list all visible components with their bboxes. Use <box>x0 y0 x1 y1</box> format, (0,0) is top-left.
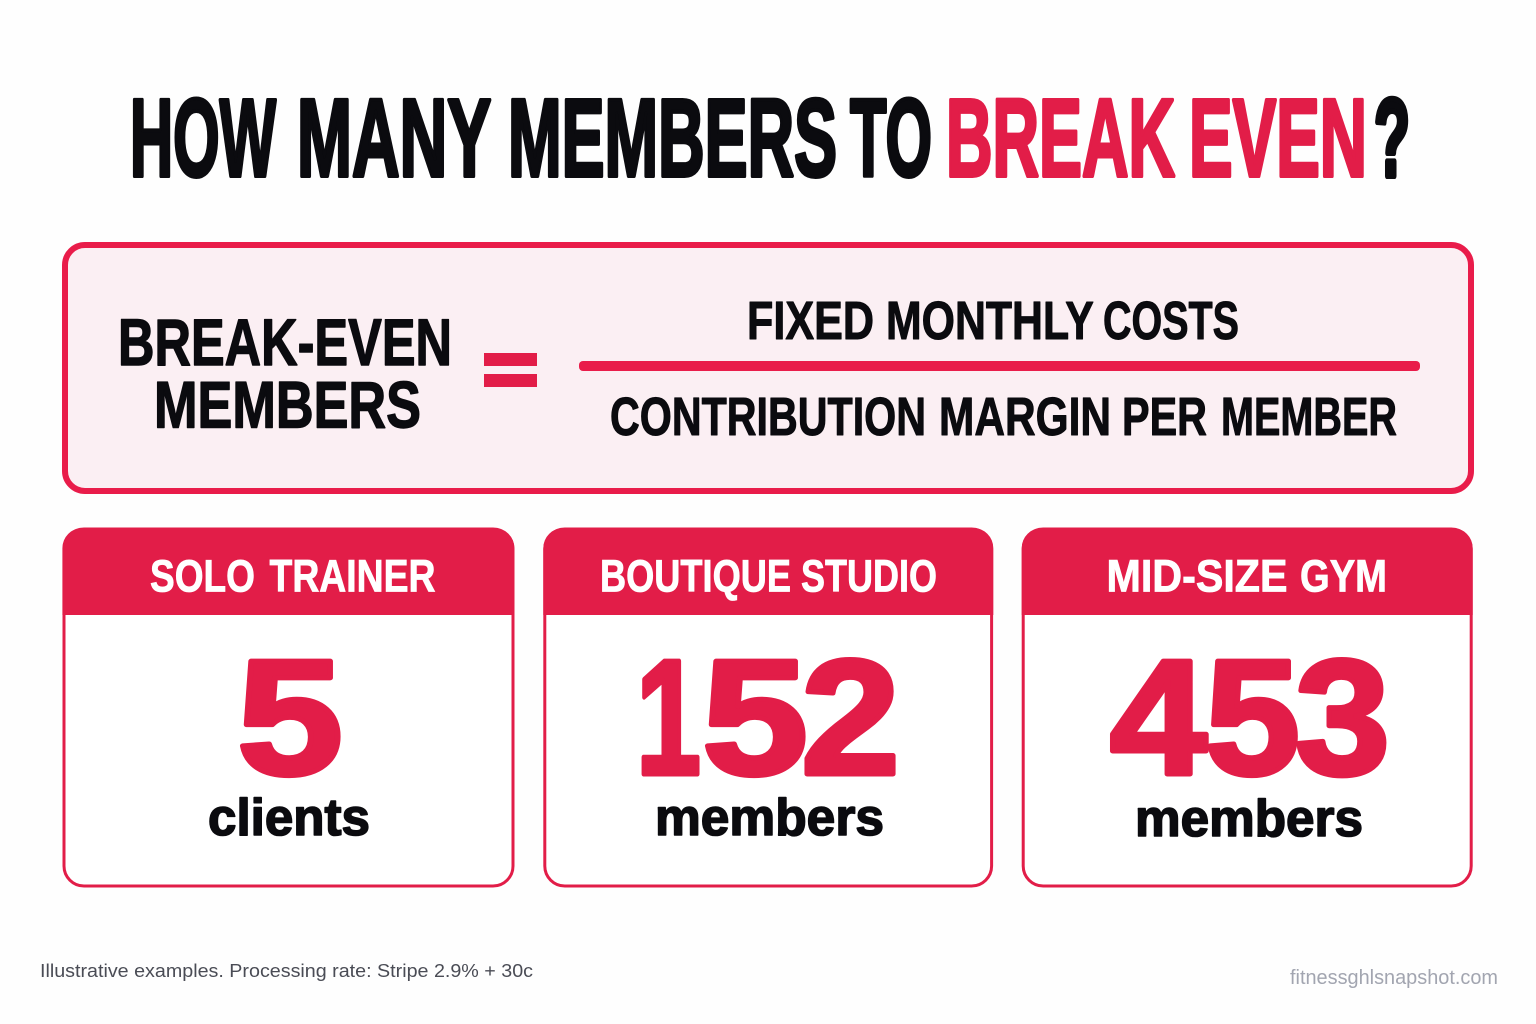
big number: 3 <box>1295 626 1390 809</box>
title: HOW <box>130 77 276 200</box>
card heading: GYM <box>1300 550 1387 602</box>
title <box>130 77 1410 200</box>
denominator: PER <box>1122 387 1207 447</box>
card header <box>62 528 514 615</box>
title: ? <box>1374 77 1410 200</box>
panel: solo trainer <box>62 528 514 886</box>
equals sign <box>484 353 537 387</box>
numerator: MONTHLY <box>886 291 1094 351</box>
title: TO <box>850 77 932 200</box>
denominator: CONTRIBUTION <box>610 387 926 447</box>
title: MEMBERS <box>508 77 837 200</box>
source credit: fitnessghlsnapshot.com <box>1290 967 1498 989</box>
card heading: MID-SIZE <box>1106 550 1288 602</box>
footnote: Illustrative examples. Processing rate: Stripe 2.9% + 30c <box>40 960 533 981</box>
formula left label: MEMBERS <box>154 368 421 442</box>
title: MANY <box>297 77 490 200</box>
big number: 4 <box>1110 626 1207 809</box>
fraction bar <box>579 361 1420 371</box>
denominator: MARGIN <box>939 387 1111 447</box>
panel: boutique studio <box>543 528 993 886</box>
card heading: STUDIO <box>801 550 937 602</box>
title: BREAK <box>946 77 1175 200</box>
big number: 5 <box>702 626 808 809</box>
big number: 5 <box>237 626 343 809</box>
big number: 1 <box>636 626 701 809</box>
unit label: members <box>655 789 884 847</box>
numerator: COSTS <box>1103 291 1239 351</box>
formula left label: BREAK-EVEN <box>118 305 452 379</box>
unit label: clients <box>208 789 370 847</box>
unit label: members <box>1135 790 1363 848</box>
title: EVEN <box>1189 77 1367 200</box>
panel: mid-size gym <box>1022 528 1473 886</box>
panel: formula <box>65 245 1471 491</box>
card header <box>1022 528 1473 615</box>
card heading: SOLO <box>150 550 255 602</box>
denominator: MEMBER <box>1221 387 1397 447</box>
card heading: TRAINER <box>270 550 436 602</box>
big number: 2 <box>801 626 900 809</box>
card heading: BOUTIQUE <box>600 550 791 602</box>
big number: 5 <box>1205 626 1300 809</box>
card header <box>543 528 993 615</box>
formula left label <box>118 305 452 442</box>
numerator: FIXED <box>747 291 874 351</box>
